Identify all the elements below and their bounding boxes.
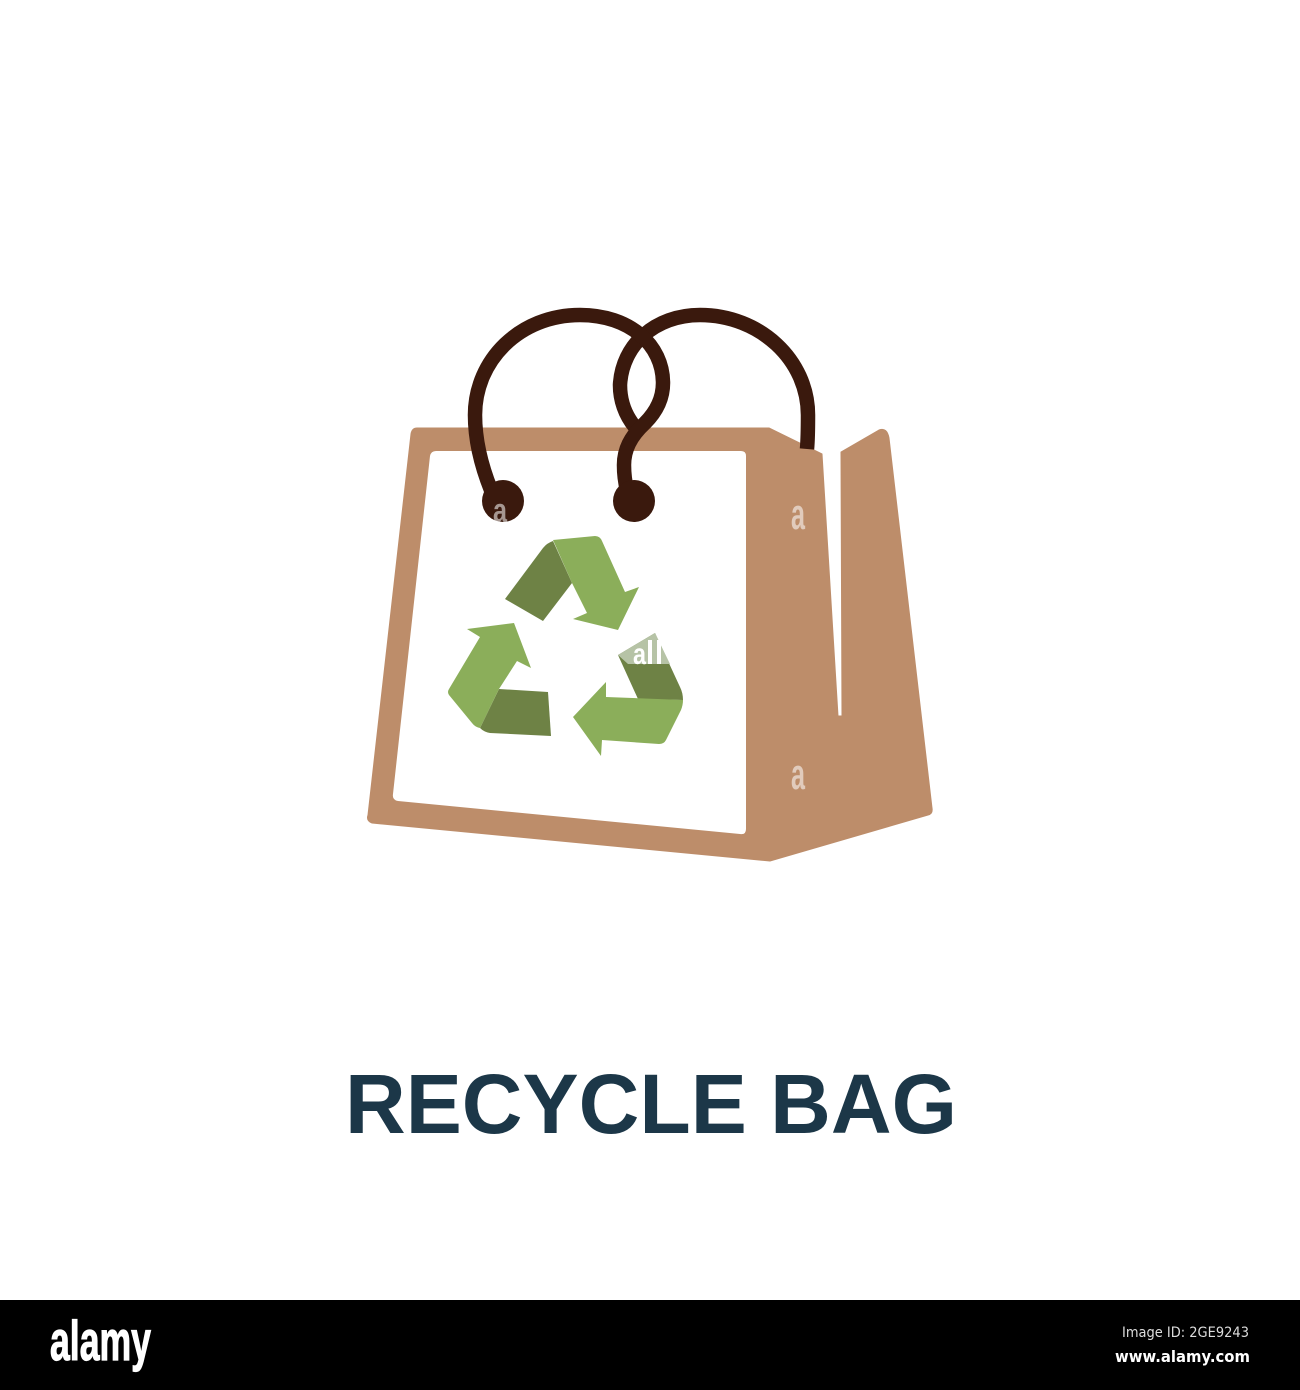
recycle arrow top (553, 536, 639, 630)
icon: recycle bag (368, 315, 932, 861)
footer bar (0, 1300, 1300, 1390)
recycle arrow top fold (505, 541, 572, 621)
watermark letters: a (493, 492, 508, 530)
alamy logo: alamy (50, 1309, 151, 1372)
watermark letters: a (791, 490, 805, 539)
recycle arrow right fold (618, 633, 683, 700)
bag front label (393, 451, 746, 834)
watermark letters (493, 490, 805, 799)
recycle symbol (448, 536, 683, 756)
bag body (368, 428, 932, 861)
watermark letters: a (791, 750, 805, 799)
bag handles (475, 315, 808, 490)
watermark tint on arrow (618, 633, 670, 664)
handle knot left (482, 480, 524, 522)
watermark marks on arrow: a (633, 638, 646, 671)
title: RECYCLE BAG (345, 1057, 957, 1151)
image id: Image ID: 2GE9243 (1122, 1325, 1249, 1341)
recycle arrow left fold (480, 689, 551, 736)
handle knot right (613, 480, 655, 522)
recycle arrow left (448, 623, 531, 728)
website: www.alamy.com (1115, 1347, 1250, 1366)
recycle arrow right (573, 682, 683, 756)
watermark marks on arrow (633, 638, 661, 671)
